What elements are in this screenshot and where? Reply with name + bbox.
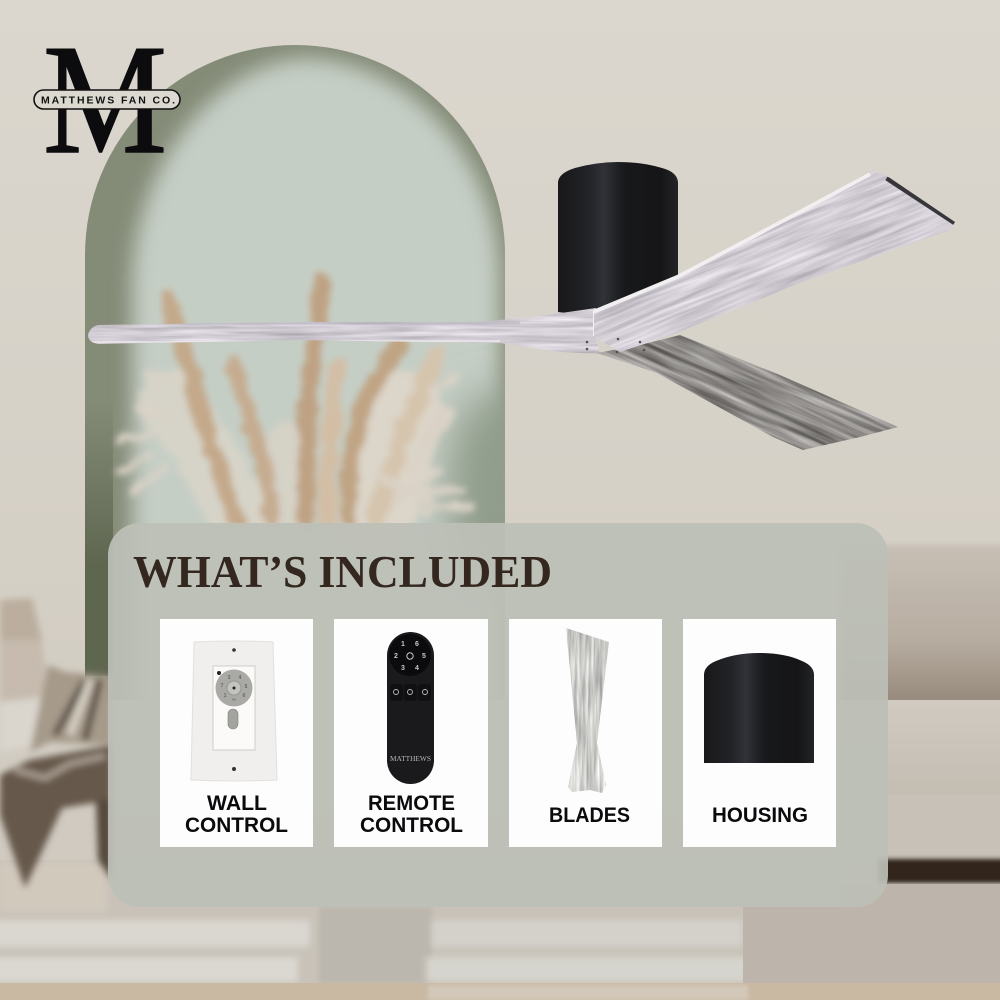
card: blades (509, 619, 662, 847)
logo banner: MATTHEWS FAN CO. (41, 94, 175, 106)
icon: housing (704, 653, 814, 763)
logo: Matthews Fan Co. (34, 12, 180, 186)
icon: wall control: 7 (221, 683, 224, 689)
label: blades: BLADES (549, 804, 630, 827)
card: housing (683, 619, 836, 847)
icon: remote: MATTHEWS (390, 754, 431, 763)
left blade (88, 308, 600, 354)
heading: WHAT’S INCLUDED (133, 546, 552, 597)
arched niche (85, 45, 505, 690)
icon: wall control: 5 (245, 684, 248, 690)
logo banner (34, 90, 180, 109)
label: wall control: WALL (207, 792, 267, 815)
floor with window light (0, 860, 1000, 1000)
icon: remote: 2 (394, 653, 398, 660)
lower blade (598, 335, 898, 450)
upper right blade (593, 172, 955, 352)
card: wall control (160, 619, 313, 847)
icon: remote: 3 (401, 665, 405, 672)
panel: what's included (108, 523, 888, 907)
icon: remote: 4 (415, 665, 419, 672)
icon: wall control: 4 (239, 675, 242, 681)
label: remote control (360, 792, 463, 837)
card: remote control (334, 619, 488, 847)
icon: remote: 6 (415, 641, 419, 648)
icon: wall control (191, 641, 277, 781)
label: wall control: CONTROL (185, 814, 288, 837)
icon: remote: 1 (401, 641, 405, 648)
icon: remote (387, 632, 434, 784)
icon: blade (566, 628, 609, 793)
left armchair and throw blanket (0, 598, 112, 888)
icon: wall control: ∞ (232, 697, 236, 703)
icon: wall control: 3 (228, 675, 231, 681)
icon: remote: 5 (422, 653, 426, 660)
logo monogram M: M (43, 12, 167, 186)
label: housing: HOUSING (712, 804, 808, 827)
right sofa (840, 545, 1000, 984)
label: wall control (185, 792, 288, 837)
fan housing (558, 162, 678, 320)
label: remote control: CONTROL (360, 814, 463, 837)
icon: wall control: 1 (224, 693, 227, 699)
hub screws (586, 338, 645, 353)
icon: wall control: 6 (243, 693, 246, 699)
pampas grass (122, 282, 470, 520)
label: remote control: REMOTE (368, 792, 455, 815)
ceiling fan (88, 162, 955, 450)
